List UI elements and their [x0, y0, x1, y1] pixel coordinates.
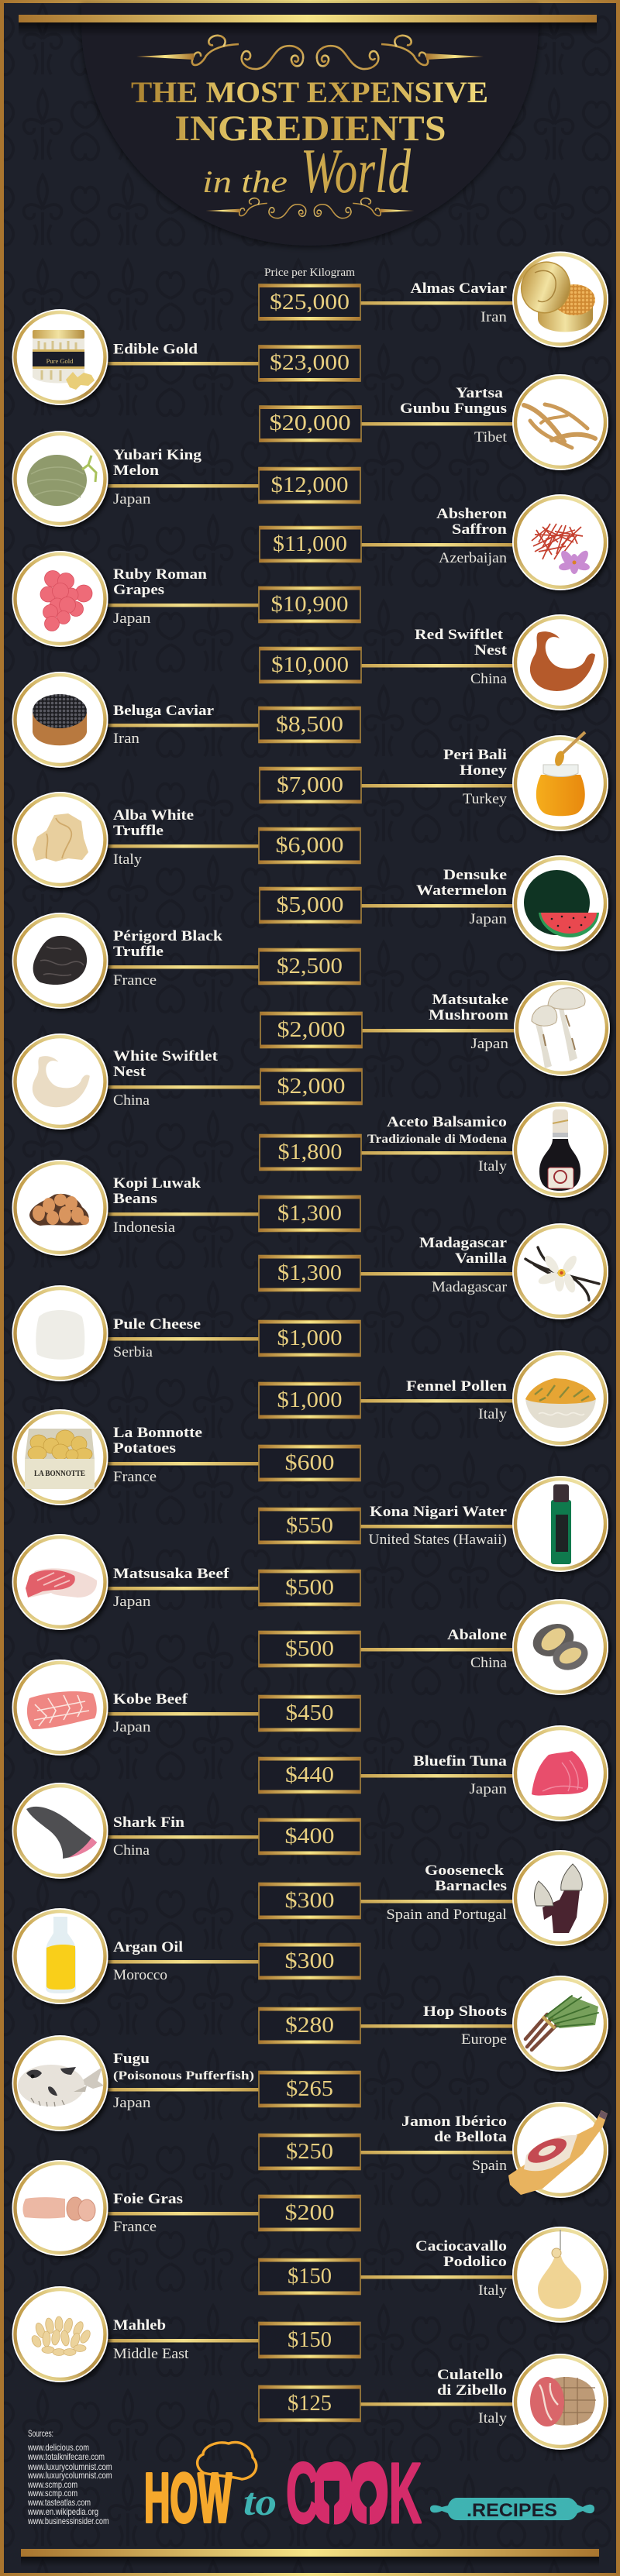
name: Peri Bali [443, 747, 507, 763]
name: Jamon Ibérico [401, 2113, 507, 2130]
price: $2,000 [277, 1017, 346, 1042]
country: Middle East [113, 2346, 189, 2362]
name: Mahleb [113, 2317, 166, 2334]
price: $1,000 [277, 1326, 343, 1350]
country: Europe [461, 2031, 507, 2048]
price [259, 1196, 360, 1232]
price: $600 [285, 1450, 335, 1475]
row: Beluga Caviar [12, 672, 360, 768]
name [436, 506, 507, 538]
name: Matsusaka Beef [113, 1566, 229, 1582]
word HOW: HOW [144, 2460, 232, 2537]
row: Kopi Luwak Beans [12, 1160, 360, 1256]
name [113, 1175, 201, 1207]
price: $8,500 [276, 712, 343, 737]
name: Kopi Luwak [113, 1175, 201, 1192]
country: Azerbaijan [439, 550, 508, 566]
sources list: www.luxurycolumnist.com [27, 2470, 112, 2481]
name: Tradizionale di Modena [367, 1133, 507, 1146]
price [259, 1757, 360, 1793]
price: $20,000 [270, 411, 350, 435]
country: Japan [113, 1594, 151, 1610]
row: Foie Gras [12, 2160, 360, 2256]
name: Mushroom [429, 1007, 508, 1023]
row: Shark Fin [12, 1783, 360, 1879]
price [259, 1883, 360, 1918]
name: Yartsa [456, 385, 504, 401]
price [260, 1012, 362, 1047]
price: $265 [286, 2076, 333, 2101]
price: $150 [288, 2264, 332, 2289]
country: Japan [113, 1719, 151, 1735]
row: Culatello di Zibello [259, 2354, 608, 2450]
icon: balsamic bottle [512, 1102, 608, 1198]
name [425, 1862, 507, 1894]
price [259, 346, 360, 381]
country: Italy [478, 1406, 508, 1422]
price: $1,800 [277, 1140, 343, 1164]
name [416, 867, 507, 899]
name [437, 2367, 507, 2399]
row: Kona Nigari Water [259, 1476, 608, 1572]
price: $300 [285, 1948, 335, 1973]
name: Nest [474, 642, 508, 659]
country: France [113, 972, 157, 989]
name: Culatello [437, 2367, 503, 2383]
name [429, 992, 508, 1023]
icon: bluefin tuna [512, 1725, 608, 1821]
name: Ruby Roman [113, 566, 207, 583]
country: Japan [113, 2095, 151, 2111]
price [259, 2008, 360, 2044]
icon: shark fin [12, 1783, 108, 1879]
name: Fugu [113, 2051, 150, 2067]
price: $440 [285, 1763, 334, 1787]
icon: matsutake mushrooms [514, 980, 610, 1076]
name: Kona Nigari Water [370, 1504, 508, 1520]
title line 3: in the [202, 164, 288, 199]
sources list [27, 2428, 112, 2526]
row: Yubari King Melon [12, 431, 360, 527]
name: Honey [460, 762, 508, 779]
country: France [113, 1469, 157, 1485]
price [259, 707, 360, 742]
price [260, 406, 361, 442]
price: $550 [286, 1513, 333, 1538]
name: Yubari King [113, 447, 202, 463]
name [113, 1048, 219, 1080]
country: Italy [113, 851, 143, 868]
country: Japan [113, 610, 151, 627]
country: Tibet [474, 429, 508, 445]
country: Japan [113, 491, 151, 507]
icon: gooseneck barnacles [512, 1850, 608, 1946]
rolling pin with .RECIPES [430, 2498, 594, 2521]
row: Densuke Watermelon [260, 855, 608, 951]
row: Absheron Saffron [260, 494, 608, 590]
price: $11,000 [273, 531, 347, 556]
price [260, 648, 361, 683]
row: Hop Shoots [259, 1976, 608, 2072]
row: Alba White Truffle [12, 792, 360, 888]
name: Almas Caviar [411, 280, 508, 297]
price: $300 [285, 1888, 335, 1913]
row: Madagascar Vanilla [259, 1223, 608, 1319]
name: di Zibello [437, 2382, 507, 2399]
country: Indonesia [113, 1219, 176, 1236]
name: Saffron [452, 521, 507, 538]
price [259, 1943, 360, 1979]
row: Mahleb [12, 2286, 360, 2382]
price [259, 468, 360, 504]
price [259, 2323, 360, 2358]
icon: jamon ham leg [508, 2102, 608, 2198]
price [259, 1320, 360, 1356]
name: Red Swiftlet [415, 627, 504, 643]
price [259, 948, 360, 984]
country: Japan [470, 1781, 508, 1797]
icon: red swiftlet nest [512, 614, 608, 710]
icon: bowl of fennel pollen [512, 1350, 608, 1446]
price [259, 827, 360, 863]
name [113, 566, 207, 598]
title line 1: THE MOST EXPENSIVE [131, 76, 488, 109]
name: Truffle [113, 944, 164, 960]
title line 3 [202, 136, 412, 206]
price [259, 2386, 360, 2422]
header panel [81, 3, 539, 246]
icon: kobe beef [12, 1659, 108, 1756]
price: $125 [288, 2391, 332, 2416]
row: Fennel Pollen [259, 1350, 608, 1446]
country: China [470, 671, 508, 687]
price [259, 1255, 360, 1291]
sources list: www.scmp.com [27, 2488, 78, 2499]
price [259, 1695, 360, 1731]
icon: white swiftlet nest [12, 1033, 108, 1130]
country: Italy [478, 2410, 508, 2426]
country: Italy [478, 1158, 508, 1175]
price [259, 1508, 360, 1543]
icon: box of potatoes: LA BONNOTTE [34, 1469, 85, 1478]
icon: cordyceps fungus [512, 374, 608, 470]
price: $150 [288, 2327, 332, 2352]
row: Almas Caviar [259, 251, 608, 347]
country: Morocco [113, 1967, 167, 1983]
row: Edible Gold [12, 309, 360, 405]
row: Matsusaka Beef [12, 1534, 360, 1630]
price [259, 1570, 360, 1605]
name: Foie Gras [113, 2191, 183, 2207]
country: Serbia [113, 1344, 153, 1360]
name: Densuke [443, 867, 507, 883]
sources list: www.businessinsider.com [27, 2516, 109, 2526]
name [113, 928, 222, 960]
name [113, 2051, 254, 2082]
name [415, 2238, 507, 2270]
name: Bluefin Tuna [413, 1753, 508, 1769]
name: Gunbu Fungus [400, 401, 507, 417]
price [260, 767, 361, 803]
icon: culatello ham [512, 2354, 608, 2450]
chef hat [198, 2442, 257, 2479]
icon: caciocavallo cheese [512, 2227, 608, 2323]
name: Potatoes [113, 1440, 176, 1457]
price: $500 [285, 1636, 334, 1661]
icon: matsusaka beef [12, 1534, 108, 1630]
name [367, 1114, 507, 1146]
country: China [470, 1655, 508, 1671]
price [259, 1819, 360, 1855]
row: Gooseneck Barnacles [259, 1850, 608, 1946]
price: $250 [286, 2139, 333, 2164]
sources list: www.tasteatlas.com [27, 2497, 91, 2508]
price [260, 1069, 362, 1105]
row: Jamon Ibérico de Bellota [259, 2102, 608, 2198]
row: La Bonnotte Potatoes [12, 1409, 360, 1505]
column heading: price per kilogram: Price per Kilogram [264, 267, 355, 279]
name: Pule Cheese [113, 1316, 201, 1333]
name [113, 447, 202, 479]
icon: jar of edible gold [12, 309, 108, 405]
price [259, 2072, 360, 2107]
price: $12,000 [271, 473, 349, 497]
icon: hop shoots bundle [512, 1976, 608, 2072]
title [131, 36, 488, 218]
sources list: www.scmp.com [27, 2479, 78, 2490]
price: $5,000 [276, 892, 344, 917]
row: Pule Cheese [12, 1285, 360, 1381]
price [260, 1134, 361, 1170]
country: China [113, 1842, 150, 1859]
name: Alba White [113, 807, 194, 824]
name: de Bellota [434, 2129, 508, 2145]
sources list: Sources: [28, 2428, 53, 2439]
price [259, 1382, 360, 1418]
icon: honey jar [512, 732, 608, 831]
icon: pule cheese [12, 1285, 108, 1381]
icon: beluga caviar [12, 672, 108, 768]
name [113, 807, 194, 839]
name: Podolico [443, 2254, 507, 2270]
price: $2,500 [277, 954, 343, 978]
price [259, 587, 360, 623]
sources list: www.luxurycolumnist.com [27, 2461, 112, 2472]
icon: melon [12, 431, 108, 527]
icon: argan oil bottle [12, 1908, 108, 2004]
icon: golden caviar tin [512, 251, 608, 347]
price [259, 1446, 360, 1481]
name: Melon [113, 463, 159, 479]
row: White Swiftlet Nest [12, 1033, 362, 1130]
name: Shark Fin [113, 1814, 184, 1831]
icon: black truffle [12, 913, 108, 1009]
name [443, 747, 508, 779]
rolling pin with .RECIPES: .RECIPES [467, 2500, 557, 2521]
row: Aceto Balsamico [260, 1102, 608, 1198]
name: Truffle [113, 823, 164, 839]
price: $25,000 [270, 290, 350, 315]
top ornament [136, 36, 484, 69]
name: Abalone [447, 1627, 507, 1643]
name: Périgord Black [113, 928, 222, 944]
icon: box of potatoes [12, 1409, 108, 1505]
second O arch [352, 2462, 385, 2524]
price: $1,300 [277, 1260, 342, 1285]
utensil: whisk [360, 2481, 377, 2524]
name [415, 627, 508, 659]
icon: black watermelon [512, 855, 608, 951]
row: Ruby Roman Grapes [12, 551, 360, 647]
price: $6,000 [276, 833, 344, 858]
word COOK: COOK [286, 2446, 422, 2541]
price: $280 [285, 2013, 334, 2038]
price: $23,000 [270, 350, 350, 375]
price: $200 [285, 2200, 335, 2225]
name: Argan Oil [113, 1939, 183, 1955]
country: Japan [470, 911, 508, 927]
price [259, 2134, 360, 2169]
logo: How to Cook .Recipes [144, 2442, 594, 2541]
name: Grapes [113, 582, 164, 598]
icon: water bottle [512, 1476, 608, 1572]
name [400, 385, 507, 417]
price [259, 2196, 360, 2231]
row: Périgord Black Truffle [12, 913, 360, 1009]
name: Absheron [436, 506, 507, 522]
name: Vanilla [455, 1250, 508, 1267]
sources list: www.en.wikipedia.org [27, 2506, 98, 2517]
name [419, 1235, 508, 1267]
country: Turkey [463, 791, 508, 807]
price: $10,900 [271, 592, 349, 617]
name [113, 1425, 202, 1457]
icon: saffron [512, 494, 608, 590]
price [260, 527, 361, 562]
country: United States (Hawaii) [369, 1532, 507, 1548]
sources list: www.delicious.com [27, 2442, 89, 2453]
name: (Poisonous Pufferfish) [113, 2069, 254, 2082]
price: $7,000 [277, 772, 343, 797]
icon: mahleb seeds [12, 2286, 108, 2382]
row: Yartsa Gunbu Fungus [260, 374, 608, 470]
price: $10,000 [271, 652, 349, 677]
icon: foie gras slices [12, 2160, 108, 2256]
name: Aceto Balsamico [387, 1114, 507, 1130]
name: Edible Gold [113, 341, 198, 358]
price: $1,300 [277, 1201, 342, 1226]
icon: jar of edible gold: Pure Gold [46, 357, 74, 365]
price [260, 888, 361, 923]
name: Matsutake [432, 992, 508, 1008]
icon: kopi luwak beans [12, 1160, 108, 1256]
row: Red Swiftlet Nest [260, 614, 608, 710]
price [259, 284, 360, 320]
title line 2: INGREDIENTS [175, 108, 446, 149]
price [259, 2259, 360, 2295]
country: Madagascar [432, 1279, 508, 1295]
price [259, 1632, 360, 1667]
name: Watermelon [416, 882, 507, 899]
country: Iran [113, 731, 140, 747]
icon: white truffle [12, 792, 108, 888]
row: Fugu [12, 2035, 360, 2131]
price: $1,000 [277, 1388, 343, 1412]
country: France [113, 2219, 157, 2235]
name: Barnacles [435, 1878, 507, 1894]
country: Spain [472, 2158, 508, 2174]
name: La Bonnotte [113, 1425, 202, 1441]
price: $450 [285, 1701, 333, 1725]
country: China [113, 1092, 150, 1109]
name: Nest [113, 1064, 146, 1080]
row: Caciocavallo Podolico [259, 2227, 608, 2323]
row: Matsutake Mushroom [260, 980, 610, 1076]
name: Beans [113, 1191, 157, 1207]
row: Kobe Beef [12, 1659, 360, 1756]
title line 3: World [301, 136, 412, 206]
name [401, 2113, 508, 2145]
price: $500 [285, 1575, 334, 1600]
icon: abalone shells [512, 1599, 608, 1695]
name: Gooseneck [425, 1862, 505, 1879]
name: Hop Shoots [423, 2003, 507, 2020]
price: $400 [285, 1824, 335, 1849]
name: Fennel Pollen [406, 1378, 507, 1395]
utensil: spatula [324, 2481, 339, 2524]
name: Kobe Beef [113, 1691, 188, 1708]
country: Italy [478, 2282, 508, 2299]
name: White Swiftlet [113, 1048, 219, 1064]
first O arch [315, 2462, 348, 2524]
icon: red grapes [12, 551, 108, 647]
icon: vanilla pods and flower [512, 1223, 608, 1319]
name: Madagascar [419, 1235, 508, 1251]
row: Peri Bali Honey [260, 732, 608, 831]
country: Spain and Portugal [386, 1907, 507, 1923]
name: Caciocavallo [415, 2238, 507, 2254]
country: Iran [480, 309, 508, 325]
bottom ornament [206, 198, 414, 218]
row: Abalone [259, 1599, 608, 1695]
sources list: www.totalknifecare.com [27, 2451, 105, 2462]
icon: pufferfish [12, 2035, 108, 2131]
row: Bluefin Tuna [259, 1725, 608, 1821]
top gold bar [19, 15, 597, 36]
name: Beluga Caviar [113, 703, 215, 719]
row: Argan Oil [12, 1908, 360, 2004]
price: $2,000 [277, 1074, 346, 1099]
bottom gold bar [21, 2549, 599, 2567]
country: Japan [471, 1036, 509, 1052]
word to: to [243, 2480, 277, 2523]
